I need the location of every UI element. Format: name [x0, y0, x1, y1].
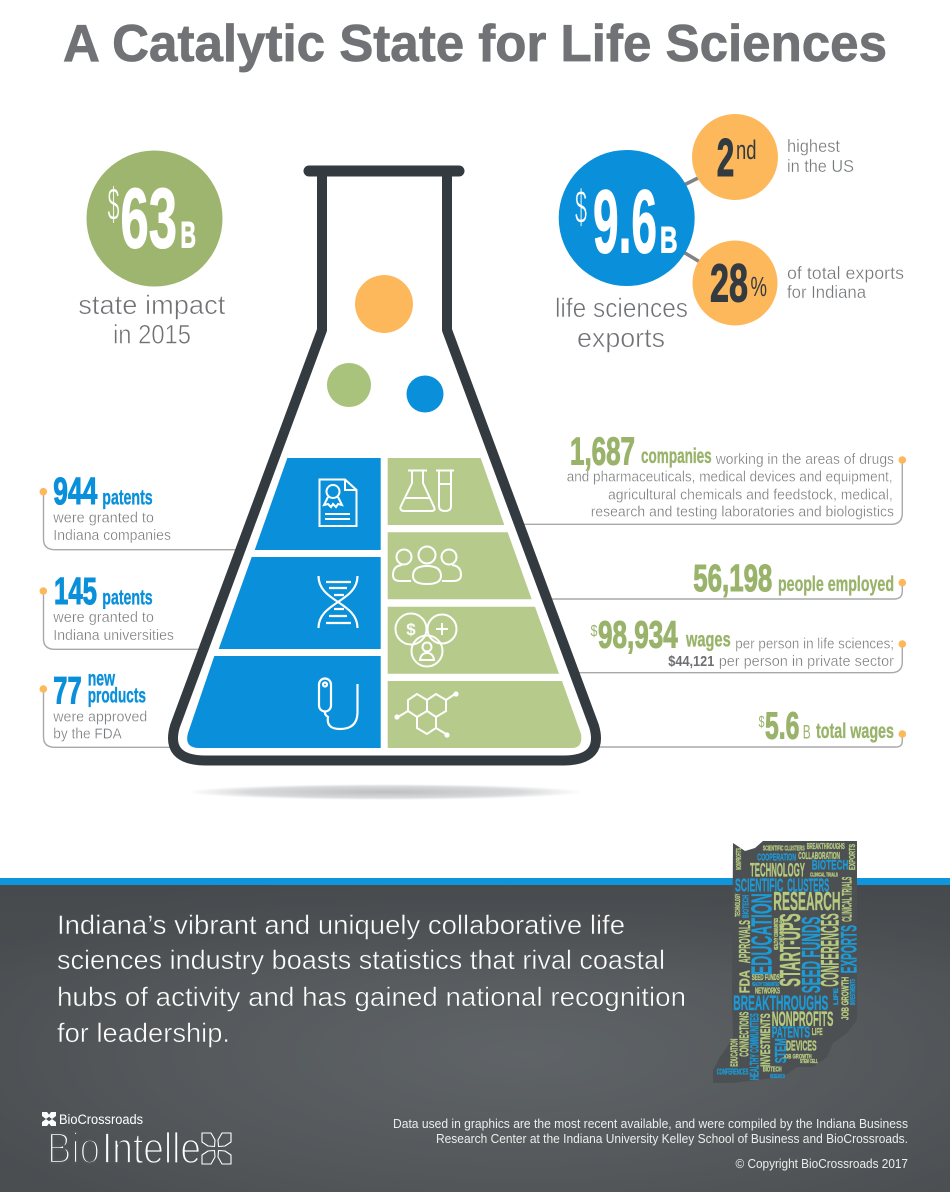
panel: new products — [187, 656, 381, 748]
Indiana word cloud map: EDUCATION — [729, 1039, 740, 1067]
stat: 944 patents: Indiana companies — [53, 527, 171, 544]
stat: wages per person: $ — [590, 623, 598, 640]
body text: Indiana’s vibrant and uniquely collaborative life — [57, 910, 625, 940]
Indiana word cloud map: EXPORTS — [848, 844, 857, 870]
Indiana word cloud map: JOB GROWTH — [840, 977, 851, 1020]
stat: 77 new products: 77 — [53, 670, 82, 712]
stat: 1,687 companies — [567, 430, 906, 521]
icon: X mark — [202, 1133, 231, 1164]
icon: medical device — [319, 678, 358, 729]
Indiana word cloud map: SEED FUNDS — [796, 917, 826, 993]
icon: people — [393, 546, 461, 584]
title: A Catalytic State for Life Sciences — [63, 15, 887, 73]
panel: wages: $ — [406, 620, 416, 639]
Indiana word cloud map: TECHNOLOGY — [735, 894, 742, 917]
Indiana word cloud map: CLINICAL TRIALS — [810, 873, 838, 879]
stat: state impact: 63 — [120, 172, 177, 266]
panel: wages — [388, 607, 559, 674]
stat: total wages: 5.6 — [765, 705, 799, 747]
footer panel background — [0, 878, 950, 1192]
Indiana word cloud map: CONNECTIONS — [736, 1012, 751, 1057]
Indiana word cloud map: BIOTECH — [812, 856, 848, 872]
icon: cross mark — [42, 1112, 56, 1126]
stat: 1,687 companies: 1,687 — [570, 430, 635, 473]
callout: 2nd highest: 2 — [717, 128, 734, 188]
callout: 2nd highest — [692, 114, 854, 200]
stat: 56,198 people employed — [693, 558, 906, 600]
Indiana word cloud map: SCIENTIFIC — [735, 876, 783, 896]
stat: wages per person: wages — [685, 629, 731, 652]
stat: 145 patents: 145 — [54, 571, 97, 613]
Indiana word cloud map: FDA — [736, 970, 753, 993]
body text: hubs of activity and has gained national recognition — [57, 982, 686, 1012]
Indiana word cloud map: INVESTMENTS — [757, 1013, 773, 1067]
Indiana word cloud map: DEVICES — [786, 1038, 817, 1055]
Indiana word cloud map: INVESTMENTS — [850, 979, 857, 1005]
stat: wages per person: 98,934 — [598, 615, 678, 657]
stat: 944 patents: 944 — [53, 471, 97, 513]
body text: sciences industry boasts statistics that rival coastal — [57, 945, 665, 975]
bubble: orange — [355, 275, 413, 333]
Indiana word cloud map: BIOTECH — [763, 1067, 782, 1074]
icon: DNA — [318, 576, 358, 628]
Indiana word cloud map: START-UPS — [775, 913, 807, 987]
Indiana word cloud map: CONFERENCES — [816, 913, 844, 987]
stat: wages per person: per person in life sciences; — [735, 636, 894, 652]
callout: 28 percent: % — [750, 271, 767, 302]
stat: total wages: $ — [758, 714, 765, 731]
stat: life sciences exports — [555, 114, 904, 353]
Indiana word cloud map: CLUSTERS — [787, 876, 829, 896]
body text: for leadership. — [57, 1018, 230, 1048]
Indiana word cloud map: COOPERATION — [757, 853, 796, 864]
panel: employment — [388, 532, 532, 599]
Indiana word cloud map: TECHNOLOGY — [750, 861, 805, 882]
stat: 77 new products: were approved — [52, 709, 147, 726]
stat: life sciences exports: life sciences — [555, 293, 688, 323]
callout: 28 percent — [692, 240, 904, 326]
Indiana word cloud map: LIFE — [812, 1027, 823, 1038]
Indiana word cloud map: RESEARCH — [773, 886, 841, 916]
stat: 77 new products — [40, 668, 147, 742]
Indiana word cloud map: DEVICES — [780, 920, 786, 945]
logo: BioCrossroads BioIntelleX: BioCrossroads — [59, 1112, 143, 1127]
Indiana word cloud map: NONPROFITS — [772, 1008, 833, 1031]
panel: patents universities — [219, 557, 381, 649]
source note — [393, 1117, 908, 1171]
logo: BioCrossroads BioIntelleX — [42, 1112, 231, 1173]
callout: 28 percent: for Indiana — [787, 282, 866, 302]
stat: state impact: state impact — [78, 290, 226, 320]
Indiana word cloud map: HEALTHY COMMUNITIES — [774, 918, 780, 950]
stat: 77 new products: by the FDA — [53, 725, 122, 742]
flask — [173, 171, 596, 760]
callout: 28 percent: of total exports — [787, 263, 904, 283]
Indiana word cloud map: STEM — [773, 1038, 790, 1063]
stat: life sciences exports: exports — [577, 323, 665, 353]
stat: 145 patents: were granted to — [52, 609, 154, 626]
stat: state impact: B — [180, 214, 196, 256]
stat: 1,687 companies: and pharmaceuticals, medical devices and equipment, — [567, 470, 893, 486]
stat: 1,687 companies: companies — [641, 445, 712, 468]
panel: companies — [388, 458, 504, 525]
stat: 145 patents — [40, 571, 174, 644]
Indiana word cloud map: HEALTHY COMMUNITIES — [752, 982, 779, 988]
Indiana word cloud map: EXPORTS — [837, 925, 862, 973]
stat: 56,198 people employed: people employed — [778, 573, 894, 596]
Indiana word cloud map: JOB GROWTH — [783, 1053, 812, 1060]
Indiana word cloud map: APPROVALS — [737, 920, 754, 963]
icon: molecule — [398, 694, 455, 734]
Indiana word cloud map: SCIENTIFIC CLUSTERS — [763, 846, 805, 853]
callout: 2nd highest: nd — [736, 135, 756, 165]
callout: 2nd highest: in the US — [787, 156, 854, 176]
stat: wages per person — [590, 615, 906, 670]
Indiana word cloud map: BREAKTHROUGHS — [807, 842, 845, 851]
panel: total wages — [388, 681, 581, 748]
stat: total wages — [758, 705, 906, 747]
callout: 2nd highest: highest — [787, 136, 840, 156]
stat: life sciences exports: 9.6 — [593, 172, 657, 272]
stat: state impact: $ — [108, 178, 120, 230]
stat: 77 new products: products — [88, 684, 146, 707]
icon: money and person — [396, 614, 456, 666]
source note: Data used in graphics are the most recent available, and were compiled by the Indiana Business — [393, 1117, 908, 1131]
Indiana word cloud map: BREAKTHROUGHS — [733, 992, 828, 1015]
stat: 1,687 companies: working in the areas of drugs — [715, 452, 894, 468]
Indiana word cloud map: NETWORKS — [755, 986, 780, 995]
logo: BioCrossroads BioIntelleX: Bio — [47, 1124, 100, 1173]
bubble: blue — [406, 376, 444, 412]
Indiana word cloud map: HEALTHY COMMUNITIES — [747, 1013, 761, 1080]
Indiana word cloud map: PATENTS — [772, 1024, 810, 1041]
body text — [57, 910, 686, 1048]
Indiana word cloud map: COLLABORATION — [798, 851, 840, 862]
icon: patent document — [320, 480, 356, 526]
stat: 944 patents: were granted to — [52, 509, 154, 526]
stat: 77 new products: new — [88, 668, 115, 691]
Indiana word cloud map: EDUCATION — [747, 893, 779, 975]
stat: 1,687 companies: research and testing laboratories and biologistics — [591, 505, 894, 521]
panel: patents companies — [255, 458, 381, 550]
stat: 145 patents: patents — [102, 586, 153, 609]
Indiana word cloud map: NONPROFITS — [736, 848, 743, 870]
Indiana word cloud map: RESEARCH — [770, 1074, 785, 1080]
stat: life sciences exports: B — [660, 220, 678, 260]
icon: lab flask and test tube — [400, 470, 454, 511]
stat: total wages: B — [803, 722, 811, 743]
stat: 944 patents — [40, 471, 171, 544]
Indiana word cloud map — [713, 841, 862, 1083]
stat: state impact: in 2015 — [113, 320, 191, 350]
stat: 145 patents: Indiana universities — [53, 627, 174, 644]
stat: 1,687 companies: agricultural chemicals and feedstock, medical, — [608, 487, 893, 503]
source note: Research Center at the Indiana University Kelley School of Business and BioCrossroads. — [436, 1132, 908, 1146]
stat: life sciences exports: $ — [575, 180, 587, 233]
callout: 28 percent: 28 — [710, 254, 748, 314]
stat: 56,198 people employed: 56,198 — [693, 558, 772, 600]
flask shadow — [187, 784, 583, 800]
Indiana word cloud map: STEM CELL — [800, 1059, 818, 1065]
Indiana word cloud map: CLINICAL TRIALS — [839, 877, 855, 922]
Indiana word cloud map: SEED FUNDS — [752, 973, 780, 982]
source note: © Copyright BioCrossroads 2017 — [736, 1157, 908, 1171]
Indiana word cloud map: LIFE — [834, 988, 840, 1005]
bubble: green — [327, 363, 371, 407]
Indiana word cloud map: CONFERENCES — [717, 1067, 749, 1076]
stat: total wages: total wages — [816, 720, 894, 743]
stat: 944 patents: patents — [102, 486, 153, 509]
stat: wages per person: $44,121 — [668, 654, 714, 670]
stat: wages per person: per person in private sector — [719, 654, 894, 670]
stat: state impact — [78, 150, 226, 350]
connector lines — [44, 460, 902, 747]
logo: BioCrossroads BioIntelleX: Intelle — [102, 1124, 201, 1173]
Indiana word cloud map: BIOTECH — [741, 895, 750, 918]
